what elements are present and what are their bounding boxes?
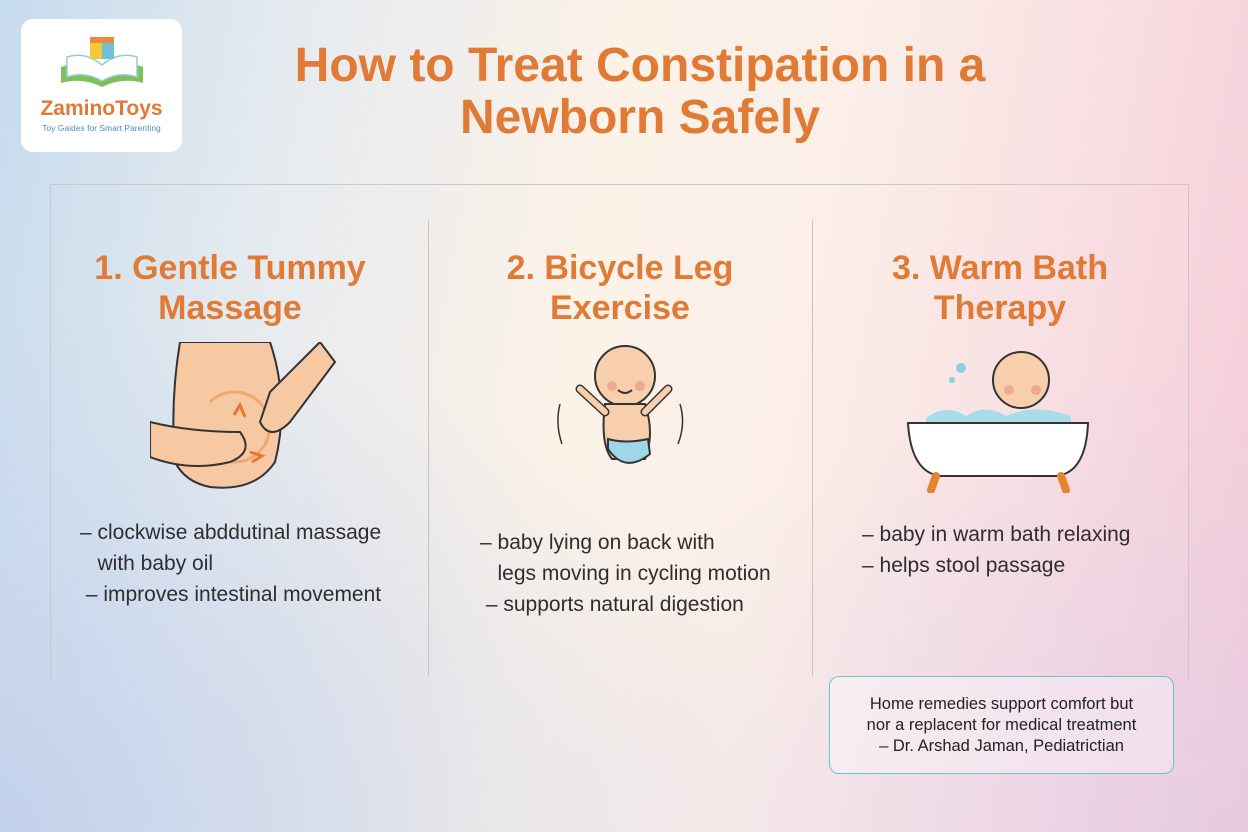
icon: book with cube — [61, 37, 143, 87]
logo card — [21, 19, 182, 152]
text 2: legs moving in cycling motion — [498, 562, 771, 585]
frame — [50, 184, 1189, 680]
logo card: Toy Gaides for Smart Pareriting — [42, 123, 161, 133]
title: Newborn Safely — [460, 91, 820, 144]
heading 1: 1. Gentle Tummy — [94, 249, 366, 287]
text 1: with baby oil — [98, 552, 213, 575]
heading 1 — [94, 249, 366, 327]
panel: tummy massage — [80, 249, 381, 606]
title — [295, 39, 986, 144]
callout: quote — [829, 676, 1174, 774]
heading 2 — [507, 249, 733, 327]
text 1 — [80, 521, 381, 606]
text 1: – improves intestinal movement — [86, 583, 381, 606]
text 2: – supports natural digestion — [486, 593, 744, 616]
panel: bicycle leg — [480, 249, 771, 616]
text 3: – baby in warm bath relaxing — [862, 523, 1130, 546]
icon: tummy massage — [150, 342, 336, 489]
heading 3: Therapy — [934, 289, 1066, 327]
text 3 — [862, 523, 1130, 577]
heading 2: Exercise — [550, 289, 690, 327]
heading 3 — [892, 249, 1108, 327]
heading 2: 2. Bicycle Leg — [507, 249, 733, 287]
text 1: – clockwise abddutinal massage — [80, 521, 381, 544]
text 2 — [480, 531, 771, 616]
callout: quote: – Dr. Arshad Jaman, Pediatrictian — [879, 737, 1124, 755]
text 2: – baby lying on back with — [480, 531, 715, 554]
text 3: – helps stool passage — [862, 554, 1065, 577]
brand name: ZaminoToys — [40, 97, 163, 120]
heading 3: 3. Warm Bath — [892, 249, 1108, 287]
panel: warm bath — [862, 249, 1130, 577]
icon: baby cycling — [557, 345, 684, 464]
icon: baby in bathtub — [906, 351, 1090, 493]
callout: quote: Home remedies support comfort but — [870, 695, 1133, 713]
title: How to Treat Constipation in a — [295, 39, 985, 92]
callout: quote: nor a replacent for medical treatment — [867, 716, 1136, 734]
heading 1: Massage — [158, 289, 302, 327]
